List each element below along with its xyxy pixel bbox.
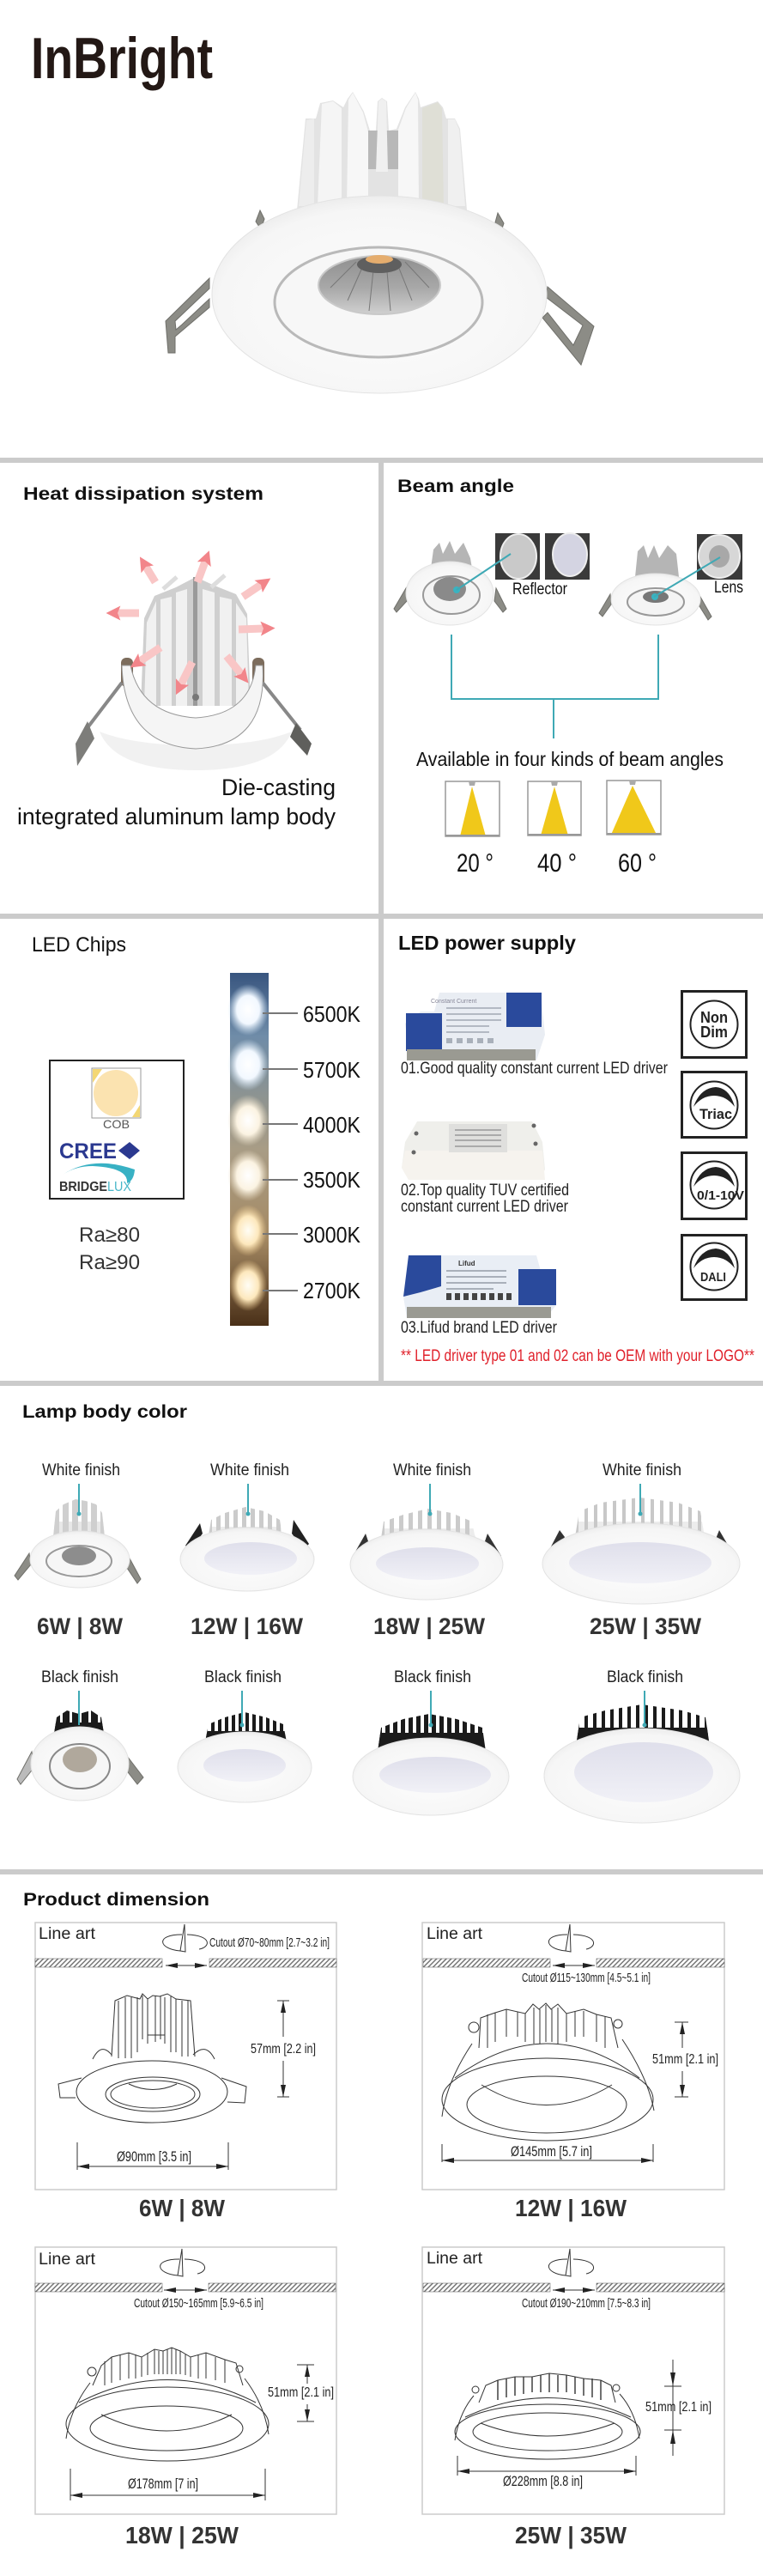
icon: triac: Triac <box>699 1106 732 1122</box>
Ra values <box>79 1224 140 1274</box>
colour temperature labels: 3500K <box>303 1167 361 1193</box>
lamp: white 18W 25W <box>350 1511 503 1600</box>
dimension diameter: Ø178mm [7 in] <box>128 2476 198 2492</box>
ceiling cutout <box>35 2249 336 2292</box>
panel: LED chips <box>32 933 361 1326</box>
dimension diameter <box>457 2456 636 2489</box>
heading: product dimension: Product dimension <box>23 1890 209 1910</box>
driver 02 caption: constant current LED driver <box>401 1198 569 1216</box>
beam angle values: 40 ° <box>537 849 577 878</box>
icon: triac <box>681 1072 747 1137</box>
ceiling cutout <box>423 1924 724 1967</box>
lens lamp <box>599 545 712 625</box>
panel: product dimension <box>23 1890 724 2549</box>
Ra values: Ra≥80 <box>79 1224 140 1247</box>
caption: die-casting body <box>17 775 336 829</box>
driver 01 photo: Constant Current <box>431 999 476 1005</box>
panel: lamp body color <box>15 1402 740 1823</box>
beam diagram 60 degrees <box>607 781 661 835</box>
black finish pointer lines <box>79 1691 645 1725</box>
wattage labels: 6W | 8W <box>37 1613 123 1639</box>
icon: 0/1-10V: 0/1-10V <box>697 1188 744 1203</box>
icon: 0/1-10V <box>681 1152 747 1219</box>
dimension height: 51mm [2.1 in] <box>645 2400 712 2415</box>
dimension height: 51mm [2.1 in] <box>652 2052 718 2067</box>
icon: non dim <box>681 991 747 1058</box>
drawing: lamp outline <box>442 2003 654 2141</box>
line art panel: 18W 25W <box>35 2247 336 2514</box>
wattage: 18W 25W: 18W | 25W <box>125 2522 239 2549</box>
line art panel: 25W 35W <box>422 2247 724 2514</box>
driver 01 photo <box>405 993 545 1060</box>
colour temperature labels: 5700K <box>303 1057 361 1083</box>
cutout size: Cutout Ø115~130mm [4.5~5.1 in] <box>522 1971 651 1985</box>
cutout size: Cutout Ø190~210mm [7.5~8.3 in] <box>522 2296 651 2311</box>
panel: LED power supply <box>398 932 754 1365</box>
white finish labels: White finish <box>393 1461 471 1479</box>
label: reflector: Reflector <box>512 580 568 598</box>
black finish labels <box>41 1668 683 1686</box>
wattage labels: 12W | 16W <box>191 1613 304 1639</box>
reflector lamp <box>394 541 506 625</box>
heading: heat dissipation system: Heat dissipation system <box>23 484 263 504</box>
lamp: white 6W 8W <box>15 1511 141 1588</box>
icon: DALI <box>681 1235 747 1300</box>
beam angle values <box>457 849 657 878</box>
line art panel: 6W 8W <box>35 1923 336 2190</box>
lamp: black 6W 8W <box>17 1722 143 1801</box>
lamp: black 12W 16W <box>178 1722 312 1802</box>
wattage labels: 25W | 35W <box>590 1613 701 1639</box>
heading: lamp body color: Lamp body color <box>22 1402 187 1422</box>
white finish labels: White finish <box>603 1461 681 1479</box>
lens photo <box>654 534 742 597</box>
driver 02 caption: 02.Top quality TUV certified <box>401 1182 569 1200</box>
white finish pointer lines <box>79 1484 640 1514</box>
teal connector bracket <box>451 635 658 738</box>
black finish labels: Black finish <box>204 1668 282 1686</box>
wattage: 12W 16W: 12W | 16W <box>515 2195 627 2221</box>
wattage: 25W 35W: 25W | 35W <box>515 2522 627 2549</box>
label: line art: Line art <box>427 2250 483 2268</box>
dimension height <box>652 2022 718 2097</box>
drawing: lamp outline <box>58 1994 246 2123</box>
section divider bands <box>0 458 763 1874</box>
driver 03 photo <box>403 1255 556 1318</box>
caption: beam angles available: Available in four kinds of beam angles <box>416 748 724 770</box>
ceiling cutout <box>423 2249 724 2292</box>
lamp: black 25W 35W <box>544 1722 740 1823</box>
icon: non dim: Non <box>700 1009 728 1026</box>
icon: non dim: Dim <box>700 1024 728 1041</box>
label: lens: Lens <box>714 579 743 597</box>
wattage labels <box>37 1613 701 1639</box>
colour temperature labels: 6500K <box>303 1001 361 1027</box>
cutout size: Cutout Ø70~80mm [2.7~3.2 in] <box>209 1935 330 1950</box>
COB chip <box>92 1068 141 1131</box>
heading: LED power supply: LED power supply <box>398 932 576 954</box>
dimension height: 57mm [2.2 in] <box>251 2042 316 2057</box>
logo: Cree: CREE <box>59 1139 117 1163</box>
panel: beam angle <box>394 477 743 878</box>
wattage labels: 18W | 25W <box>373 1613 485 1639</box>
panel: heat dissipation <box>17 484 336 829</box>
label: line art: Line art <box>427 1925 483 1943</box>
drawing: lamp outline <box>66 2348 269 2461</box>
logo: Bridgelux: BRIDGE <box>59 1180 107 1194</box>
chip brands box <box>50 1060 184 1199</box>
icon: DALI: DALI <box>700 1270 726 1285</box>
lamp: white 12W 16W <box>180 1511 314 1591</box>
lamp: white 25W 35W <box>542 1511 740 1604</box>
dimension diameter <box>77 2142 228 2170</box>
dimension diameter: Ø228mm [8.8 in] <box>503 2473 583 2489</box>
ceiling cutout <box>35 1924 336 1967</box>
black finish labels: Black finish <box>394 1668 471 1686</box>
spring clips <box>76 658 312 766</box>
driver 03 caption: 03.Lifud brand LED driver <box>401 1319 558 1337</box>
dimension diameter <box>442 2143 653 2162</box>
black finish labels: Black finish <box>607 1668 683 1686</box>
driver 03 photo: Lifud <box>458 1260 475 1267</box>
dimension height: 51mm [2.1 in] <box>268 2385 334 2400</box>
beam angle values: 60 ° <box>618 849 657 878</box>
dimension diameter: Ø145mm [5.7 in] <box>511 2143 592 2160</box>
line art panel: 12W 16W <box>422 1923 724 2190</box>
black finish labels: Black finish <box>41 1668 118 1686</box>
hero lamp photo <box>166 92 594 393</box>
logo: Bridgelux: LUX <box>107 1180 131 1194</box>
caption: die-casting body: Die-casting <box>221 775 336 800</box>
driver 02 photo <box>402 1121 545 1180</box>
dimension diameter <box>70 2469 265 2500</box>
drawing: lamp outline <box>455 2373 640 2459</box>
dimension height <box>251 2001 316 2097</box>
beam angle values: 20 ° <box>457 849 494 878</box>
illustration: lamp back with heat arrows <box>76 562 312 770</box>
dimension diameter: Ø90mm [3.5 in] <box>117 2148 191 2165</box>
lamp: black 18W 25W <box>353 1722 509 1815</box>
white finish labels: White finish <box>42 1461 120 1479</box>
logo: InBright: InBright <box>31 26 213 91</box>
colour temperature labels: 4000K <box>303 1112 361 1138</box>
white finish labels: White finish <box>210 1461 289 1479</box>
heading: beam angle: Beam angle <box>397 477 514 496</box>
caption: die-casting body: integrated aluminum lamp body <box>17 804 336 829</box>
heading: LED chips: LED Chips <box>32 933 126 957</box>
LED strip colour temperature <box>227 973 298 1326</box>
driver 02 caption <box>401 1182 569 1216</box>
Ra values: Ra≥90 <box>79 1251 140 1274</box>
white finish labels <box>42 1461 681 1479</box>
cutout size: Cutout Ø150~165mm [5.9~6.5 in] <box>134 2296 263 2311</box>
logo: Bridgelux <box>59 1163 135 1194</box>
colour temperature labels: 2700K <box>303 1278 361 1303</box>
beam diagram 40 degrees <box>528 781 581 835</box>
colour temperature labels <box>303 1001 361 1303</box>
dimension height <box>645 2360 712 2456</box>
reflector photos <box>457 533 590 590</box>
label: line art: Line art <box>39 2251 96 2269</box>
dimension height <box>268 2365 334 2421</box>
COB chip: COB <box>103 1117 130 1131</box>
wattage: 6W 8W: 6W | 8W <box>139 2195 226 2221</box>
beam diagram 20 degrees <box>445 781 500 836</box>
label: line art: Line art <box>39 1925 96 1943</box>
colour temperature labels: 3000K <box>303 1222 361 1248</box>
driver 01 caption: 01.Good quality constant current LED driver <box>401 1060 669 1078</box>
